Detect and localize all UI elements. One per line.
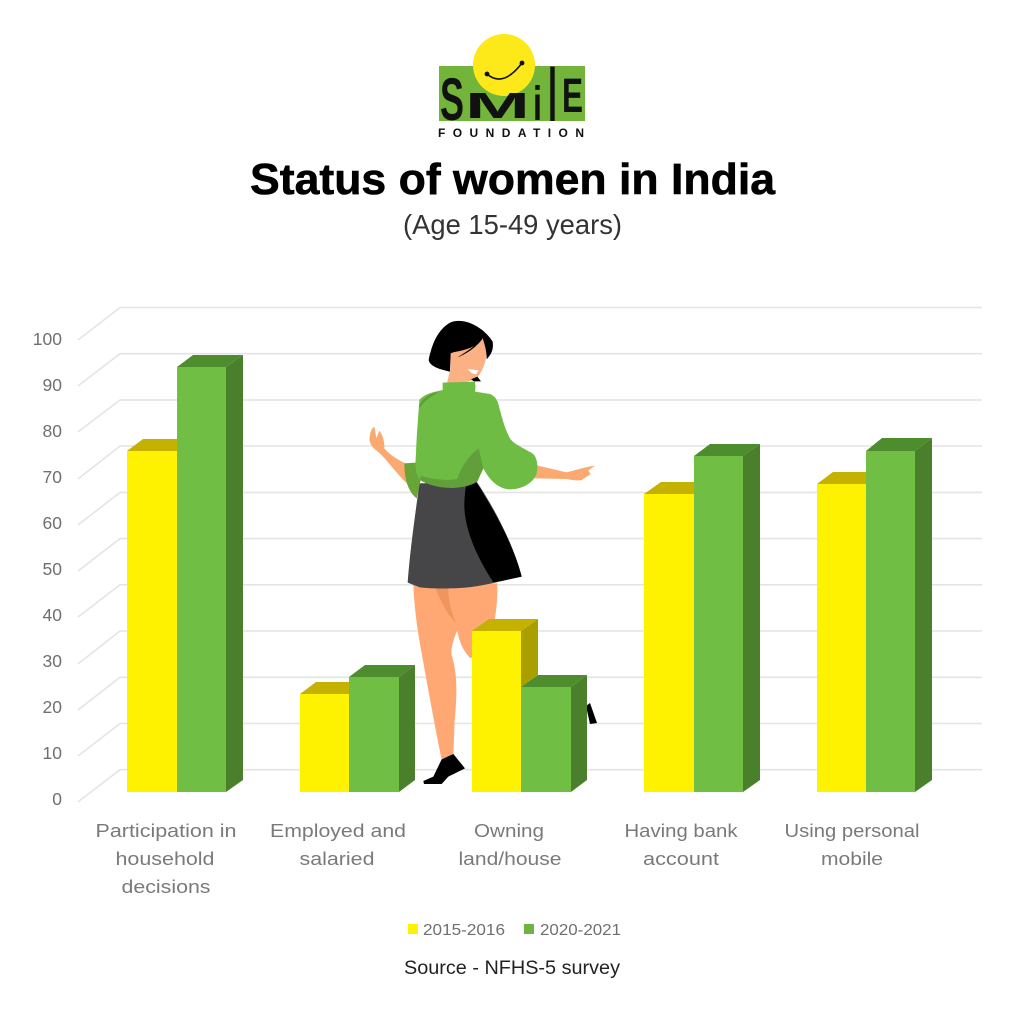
y axis labels: 0 — [52, 789, 62, 809]
logo: Smile Foundation — [438, 34, 585, 140]
legend: 2020-2021 — [540, 922, 621, 939]
logo: Smile Foundation: M — [465, 85, 530, 126]
far arm — [370, 427, 407, 483]
blouse shadows — [419, 392, 439, 408]
near arm — [534, 465, 595, 480]
skirt — [408, 482, 522, 588]
category labels: account — [643, 848, 719, 869]
y axis labels — [33, 329, 62, 809]
subtitle: (Age 15-49 years) — [403, 209, 622, 240]
category labels: Participation in — [96, 820, 236, 841]
title: Status of women in India — [250, 155, 776, 204]
category labels — [96, 820, 920, 897]
y axis labels: 80 — [43, 421, 62, 441]
chart gridlines — [78, 308, 982, 802]
y axis labels: 30 — [43, 651, 62, 671]
logo: Smile Foundation: S — [440, 66, 464, 133]
source: Source - NFHS-5 survey — [404, 958, 621, 979]
bar group: Having bank account — [644, 444, 760, 792]
logo: Smile Foundation: E — [562, 70, 583, 123]
blouse — [415, 382, 537, 489]
smile — [468, 369, 479, 374]
legs — [413, 583, 497, 784]
back shoe — [586, 703, 597, 724]
y axis labels: 10 — [43, 743, 62, 763]
legend: 2015-2016 — [423, 922, 505, 939]
logo: Smile Foundation: i — [533, 78, 542, 131]
bar group: Employed and salaried — [300, 665, 415, 792]
bar group: Using personal mobile — [817, 438, 932, 792]
y axis labels: 40 — [43, 605, 62, 625]
category labels: salaried — [300, 848, 374, 869]
logo: Smile Foundation: FOUNDATION — [438, 126, 584, 140]
hair — [429, 321, 493, 372]
category labels: land/house — [458, 848, 562, 869]
category labels: household — [116, 848, 214, 869]
category labels: decisions — [122, 876, 210, 897]
y axis labels: 50 — [43, 559, 62, 579]
y axis labels: 70 — [43, 467, 62, 487]
category labels: Employed and — [270, 820, 406, 841]
category labels: mobile — [821, 848, 883, 869]
category labels: Having bank — [624, 820, 738, 841]
y axis labels: 100 — [33, 329, 62, 349]
legend — [408, 922, 621, 939]
bar group: Participation in household decisions — [127, 355, 243, 792]
y axis labels: 60 — [43, 513, 62, 533]
bar group: Owning land/house — [472, 619, 587, 792]
neck and face — [443, 330, 486, 393]
sleeve cuff far — [404, 463, 421, 498]
logo: Smile Foundation: l — [548, 53, 557, 137]
y axis labels: 20 — [43, 697, 62, 717]
category labels: Owning — [474, 820, 544, 841]
category labels: Using personal — [784, 820, 920, 841]
illustration: woman — [370, 321, 597, 784]
y axis labels: 90 — [43, 375, 62, 395]
